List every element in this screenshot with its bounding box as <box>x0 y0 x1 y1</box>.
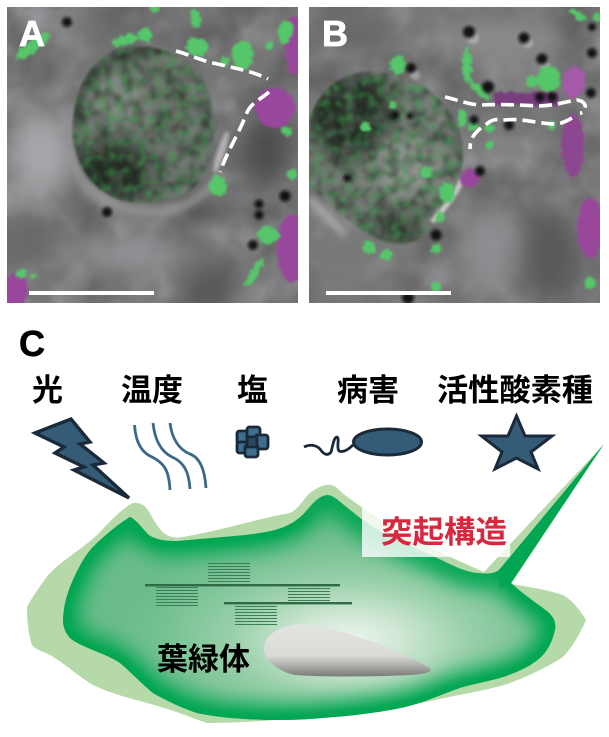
magenta signals B <box>461 66 603 258</box>
cell halo A <box>70 150 222 212</box>
icon: star <box>482 416 552 469</box>
label: temperature: 温度 <box>121 373 183 408</box>
callout: protrusion structure: 突起構造 <box>381 515 507 550</box>
cell body A <box>71 45 214 204</box>
label: disease: 病害 <box>337 373 399 408</box>
callout: protrusion structure <box>362 507 510 557</box>
dashed outline A <box>176 51 269 172</box>
label: light: 光 <box>32 373 63 408</box>
label: chloroplast: 葉緑体 <box>157 642 250 677</box>
icon: temperature waves <box>134 423 206 490</box>
label B: B <box>322 13 348 54</box>
icon: bacterium <box>304 429 422 455</box>
scale bar A <box>29 291 154 295</box>
particle highlights B <box>410 32 550 80</box>
dashed outline B <box>445 97 585 149</box>
starch grain <box>264 624 431 676</box>
icon: lightning <box>35 419 129 498</box>
icon: salt crystals <box>237 427 268 457</box>
chloroplast body <box>55 440 609 725</box>
stromule outer envelope <box>27 444 604 723</box>
chloroplast diagram <box>27 440 609 725</box>
label: reactive oxygen species: 活性酸素種 <box>437 373 593 408</box>
stress labels <box>32 373 593 408</box>
green signals A <box>13 3 298 289</box>
label: salt: 塩 <box>237 373 268 408</box>
dark particles A <box>62 17 290 250</box>
scale bar B <box>326 291 451 295</box>
green signals B <box>360 7 601 292</box>
thylakoid membranes <box>145 563 352 625</box>
cell body B <box>309 70 464 245</box>
dark particles B <box>344 23 597 304</box>
panel A: micrograph <box>0 3 307 306</box>
label C: C <box>19 323 45 364</box>
magenta signals A <box>2 15 307 306</box>
label A: A <box>19 13 45 54</box>
panel B: micrograph <box>305 7 603 305</box>
